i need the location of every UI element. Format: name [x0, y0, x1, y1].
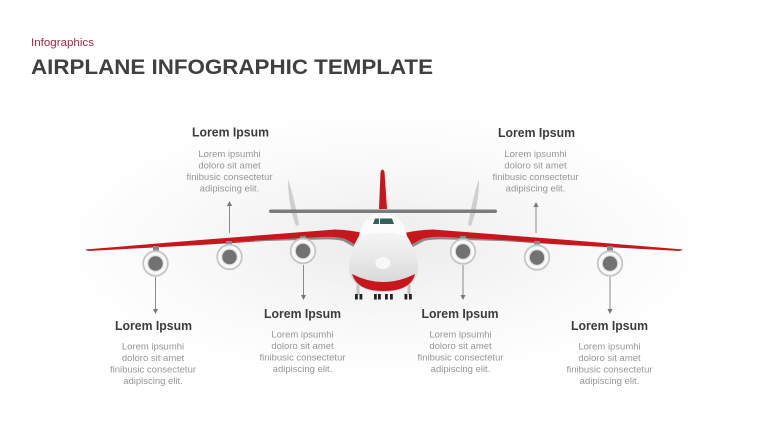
callout: bottom inner right: doloro sit amet	[429, 341, 492, 352]
airplane	[85, 170, 683, 300]
callout: bottom inner right: finibusic consectetur	[417, 352, 504, 364]
callout: bottom far right: doloro sit amet	[578, 353, 641, 364]
callout: top right: doloro sit amet	[504, 160, 567, 172]
callout: bottom inner left	[259, 306, 346, 375]
callout: bottom inner left: Lorem ipsumhi	[271, 330, 334, 340]
callout: bottom far right: finibusic consectetur	[566, 364, 653, 376]
right wing	[404, 230, 683, 251]
callout: bottom far left: doloro sit amet	[122, 353, 185, 364]
subtitle: Infographics	[31, 37, 95, 49]
callout: top left: Lorem ipsumhi	[198, 149, 261, 160]
callout: top right: finibusic consectetur	[492, 172, 579, 183]
callout: top right	[492, 125, 579, 194]
callout: bottom inner right: adipiscing elit.	[431, 364, 490, 375]
callout: top left: Lorem Ipsum	[192, 124, 269, 140]
callout: top left: doloro sit amet	[198, 160, 261, 172]
arrow 6	[608, 277, 612, 314]
callout: bottom far left	[110, 318, 196, 387]
callout: top right: adipiscing elit.	[506, 184, 565, 194]
callout: bottom inner right: Lorem ipsumhi	[429, 330, 492, 340]
engine pylons	[153, 236, 613, 252]
callout: bottom far right: Lorem ipsumhi	[578, 342, 641, 352]
callout: top left: finibusic consectetur	[186, 172, 273, 183]
callout: bottom far right	[566, 318, 653, 387]
horizontal stabilizer	[269, 210, 497, 213]
left wing	[85, 230, 363, 251]
callout: bottom inner left: adipiscing elit.	[273, 364, 332, 375]
arrow 3	[301, 265, 306, 300]
callout: bottom far left: Lorem Ipsum	[115, 318, 192, 333]
background glow	[39, 105, 729, 385]
red belly	[352, 274, 415, 291]
winglet right	[468, 179, 479, 226]
callout: bottom far left: adipiscing elit.	[123, 376, 183, 387]
title: AIRPLANE INFOGRAPHIC TEMPLATE	[31, 55, 433, 79]
callout: bottom far right: adipiscing elit.	[580, 376, 639, 387]
arrow 4	[460, 265, 466, 300]
nose top highlight	[360, 213, 406, 236]
windshield	[373, 218, 394, 224]
landing wheels	[355, 294, 412, 300]
callout: bottom inner left: doloro sit amet	[271, 341, 334, 352]
arrow 1	[153, 277, 158, 314]
callout: top left: adipiscing elit.	[200, 184, 259, 194]
callout: bottom inner left: Lorem Ipsum	[264, 306, 341, 321]
callout: bottom inner right: Lorem Ipsum	[422, 306, 498, 321]
callout: bottom inner left: finibusic consectetur	[259, 352, 346, 364]
vertical tail	[379, 170, 387, 209]
winglet left	[288, 179, 299, 226]
callout: bottom far left: Lorem ipsumhi	[122, 342, 184, 352]
nose light	[376, 257, 390, 269]
arrows	[153, 201, 612, 314]
arrow 2	[227, 201, 232, 233]
engines	[143, 239, 622, 276]
callout: top right: Lorem ipsumhi	[504, 149, 567, 160]
callout: bottom far right: Lorem Ipsum	[571, 318, 648, 333]
callout: bottom inner right	[417, 306, 504, 375]
arrow 5	[534, 202, 538, 233]
landing gear struts	[358, 283, 409, 295]
fuselage	[349, 213, 418, 292]
callout: bottom far left: finibusic consectetur	[110, 364, 196, 376]
callout: top left	[186, 124, 273, 194]
callout: top right: Lorem Ipsum	[498, 125, 575, 140]
